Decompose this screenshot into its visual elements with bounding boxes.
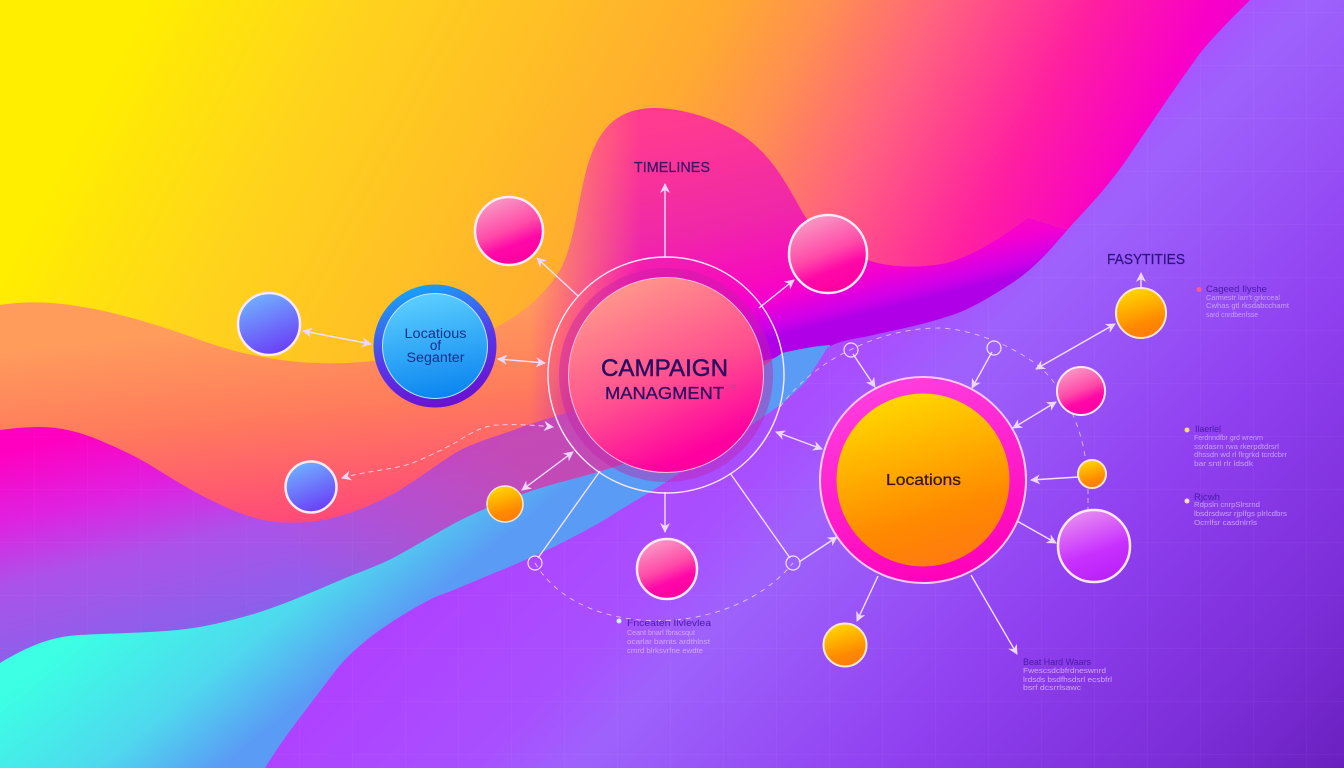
node: right pink <box>1057 367 1105 415</box>
node: right violet <box>1058 510 1130 582</box>
arrow: to top right pink node <box>759 280 794 308</box>
note: bottom centre: Fnceaten Ilvlevlea <box>627 618 712 629</box>
heading: fasytities: FASYTITIES <box>1107 252 1185 268</box>
hub title: CAMPAIGN <box>601 355 728 382</box>
node: lower left blue <box>286 462 336 512</box>
background wave: magenta to violet <box>0 345 830 768</box>
node: top right pink <box>789 215 867 293</box>
arrow: to violet node <box>1017 521 1056 543</box>
node: bottom orange <box>824 624 866 666</box>
hub: locations of segment: Seganter <box>406 350 465 365</box>
note: bottom centre: cmrd blrksvrfne ewdte <box>627 646 703 655</box>
dashed arc: bottom <box>535 563 793 621</box>
note: bottom right: Fwescsdcbfrdneswnrd <box>1023 666 1106 675</box>
note: right lower: Rdpsln cnrpSlrsrnd <box>1194 500 1260 509</box>
hub label: Locatious <box>404 326 467 341</box>
dashed arc: around locations <box>780 328 1085 456</box>
line: to lower left ring node <box>538 471 600 558</box>
arrow: small orange node to locations <box>1031 477 1078 480</box>
connector arrows and dashed arcs <box>303 184 1141 654</box>
line: to lower right ring node <box>730 473 790 558</box>
note: right lower: lbsdrsdwsr rjplfgs plrlcdbrs <box>1194 509 1287 518</box>
note: right top: sard cnrdbenfsse <box>1206 310 1258 319</box>
hub: locations <box>820 377 1026 583</box>
note: right middle: bar sntl rlr ldsdk <box>1194 459 1253 468</box>
note: right middle: ssrdasrn rwa rkerpdtdrsrl <box>1194 442 1279 451</box>
arrow: to right pink node <box>1013 402 1056 428</box>
node: right orange <box>1116 288 1166 338</box>
arrow: to bottom orange node <box>857 576 878 621</box>
hub: locations of segment <box>374 284 496 408</box>
arrow: upper ring node right <box>972 352 992 388</box>
note: right middle: dhssdn wd rl flrgrkd tcrdcbrr <box>1194 450 1288 459</box>
arrow: core to locations <box>776 432 822 449</box>
arrow: to bottom note <box>971 575 1017 654</box>
node: top left pink <box>475 197 543 265</box>
note: right middle: Ilaerlel <box>1195 424 1221 434</box>
note: right middle: Ferdnndfbr grd wrenrn <box>1194 433 1263 442</box>
note: right top: Cageed Ilyshe <box>1206 284 1267 294</box>
hub: campaign management <box>548 257 784 493</box>
arrow: ring node to locations <box>799 537 837 562</box>
note: bottom centre: Ceant bnarl fbracsqut <box>627 628 696 637</box>
node: bottom pink <box>637 539 697 599</box>
dashed arrow: lower blue node <box>342 425 553 478</box>
heading: timelines: TIMELINES <box>634 160 710 176</box>
arrow: blue node to locations <box>303 331 371 344</box>
note: right lower: Rjcwh <box>1194 492 1220 502</box>
note: right lower: Ocrrlfsr casdnlrrls <box>1194 518 1257 527</box>
background wave: pink bump <box>536 108 1068 422</box>
note: right top <box>1196 284 1290 319</box>
arrow: to right orange node <box>1036 324 1115 369</box>
arrow: up from right orange node <box>1140 273 1142 288</box>
node: left blue <box>238 293 300 355</box>
note: bottom centre: ocarlar barnts ardthlnst <box>627 637 711 646</box>
note: bottom right: lrdsds bsdfhsdsrl ecsbfrl <box>1023 675 1112 684</box>
note: right top: Cwhas gtl rksdabcchamt <box>1206 301 1290 310</box>
note: bottom right <box>1023 657 1112 692</box>
arrow: to small orange node <box>522 452 573 490</box>
arrow: to timelines <box>664 184 666 258</box>
arrow: to bottom pink node <box>664 492 666 532</box>
node: small right orange <box>1078 460 1106 488</box>
note: bottom centre <box>616 618 712 655</box>
arrow: to top left pink node <box>537 258 578 296</box>
note: right top: Carmestr larr't grkrceal <box>1206 293 1280 302</box>
hub label: Locations <box>886 472 961 489</box>
arrow: upper ring node left <box>853 354 875 387</box>
note: bottom right: Beat Hard Waars <box>1023 657 1091 668</box>
hub: campaign management: MANAGMENT <box>605 383 724 403</box>
dashed line: orange to violet node <box>1087 489 1089 509</box>
arrow: locations to core <box>498 359 545 363</box>
background wave: teal to blue <box>0 345 830 768</box>
note: right middle <box>1184 424 1288 468</box>
small ring nodes <box>528 341 1001 570</box>
note: right lower <box>1184 492 1287 527</box>
node: small orange <box>487 486 523 522</box>
hub: locations of segment: of <box>430 338 441 353</box>
note: bottom right: bsrf dcsrrlsawc <box>1023 683 1081 692</box>
